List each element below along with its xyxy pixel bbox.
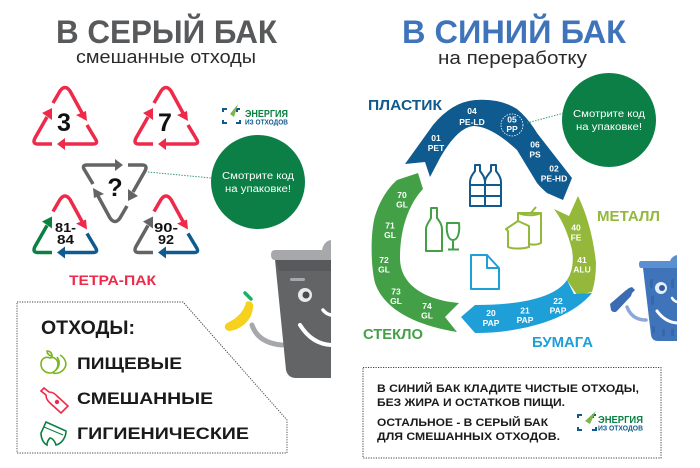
recycling triangle: unknown code: ? <box>107 174 123 202</box>
code labels: paper <box>483 296 567 328</box>
label: metal: МЕТАЛЛ <box>597 209 660 225</box>
code labels: metal: 41 <box>577 255 587 265</box>
connector: right dotted line <box>527 113 564 123</box>
label: paper: БУМАГА <box>532 335 594 351</box>
text block: clean waste: В СИНИЙ БАК КЛАДИТЕ ЧИСТЫЕ ОТХОДЫ, <box>377 382 639 395</box>
arrow: paper <box>461 280 592 333</box>
callout: right green circle: на упаковке! <box>576 122 642 133</box>
smile <box>300 325 331 345</box>
code labels: plastic: PS <box>529 150 541 160</box>
arm <box>252 325 282 345</box>
code labels: glass: GL <box>396 200 408 210</box>
code labels: plastic: 05 <box>507 114 517 124</box>
icon: paper sheet <box>471 255 499 289</box>
list item: hygiene <box>41 422 249 445</box>
code labels: glass: 73 <box>391 286 401 296</box>
recycling triangle: tetra pak 90-92: 90- <box>154 220 178 235</box>
code labels: plastic: 02 <box>549 164 559 174</box>
code labels: plastic: PET <box>428 143 445 153</box>
logo: energy from waste, bottom <box>578 411 643 432</box>
illustration: blue bin character with bottle <box>610 255 677 341</box>
title: blue bin heading: В СИНИЙ БАК <box>402 14 626 50</box>
label: plastic: ПЛАСТИК <box>368 98 442 114</box>
text block: the rest <box>377 416 560 443</box>
panel: blue bin instructions <box>363 368 661 458</box>
logo: energy from waste, top: ИЗ ОТХОДОВ <box>245 120 288 126</box>
bin vents <box>650 279 674 336</box>
recycling triangle: tetra pak 81-84: 84 <box>57 232 75 247</box>
logo: energy from waste, bottom: ИЗ ОТХОДОВ <box>598 426 643 432</box>
code labels: plastic: 06 <box>530 140 540 150</box>
logo: energy from waste, bottom: ЭНЕРГИЯ <box>598 415 643 426</box>
arm <box>627 307 646 320</box>
illustration: grey bin character with banana <box>225 240 331 378</box>
title: grey bin heading: смешанные отходы <box>76 47 256 67</box>
recycling triangle: tetra pak 90-92: 92 <box>158 232 174 247</box>
callout: left green circle: на упаковке! <box>225 184 291 195</box>
code labels: paper: PAP <box>550 306 567 316</box>
bin body <box>643 268 677 341</box>
code labels: paper: 22 <box>553 296 563 306</box>
code labels: glass: 70 <box>397 190 407 200</box>
code labels: metal <box>571 222 591 274</box>
list item: mixed <box>41 388 213 413</box>
code labels: paper: 20 <box>486 308 496 318</box>
text block: clean waste: БЕЗ ЖИРА И ОСТАТКОВ ПИЩИ. <box>377 397 565 409</box>
code labels: plastic: 01 <box>431 133 441 143</box>
recycling triangle: code 7 <box>135 88 198 150</box>
code labels: glass <box>378 190 433 320</box>
icon: plastic bottles <box>470 165 501 206</box>
code labels: plastic: 04 <box>467 106 477 116</box>
text block: the rest: ОСТАЛЬНОЕ - В СЕРЫЙ БАК <box>377 416 548 429</box>
title: blue bin heading: на переработку <box>438 48 587 68</box>
panel: waste list <box>17 302 287 453</box>
title: grey bin heading: В СЕРЫЙ БАК <box>56 14 277 50</box>
arrow: glass <box>372 173 459 332</box>
code labels: paper: 21 <box>520 306 530 316</box>
recycling triangle: tetra pak 81-84 <box>34 196 97 258</box>
code labels: metal: ALU <box>573 264 591 274</box>
code labels: plastic: PE-LD <box>459 117 485 127</box>
callout: right green circle <box>562 73 656 167</box>
recycling triangle: code 3: 3 <box>57 109 71 137</box>
recycling triangle: unknown code <box>83 159 146 222</box>
bottle <box>610 287 635 312</box>
icon: glass bottle and wine glass <box>426 208 459 251</box>
code labels: plastic: PE-HD <box>541 174 567 184</box>
connector: left dotted line <box>148 172 211 178</box>
arrow: plastic <box>405 100 572 200</box>
smile <box>657 311 677 323</box>
list item: food: ПИЩЕВЫЕ <box>77 354 182 373</box>
heading: waste: ОТХОДЫ: <box>41 318 135 339</box>
label: glass: СТЕКЛО <box>363 327 423 343</box>
logo: energy from waste, top: ЭНЕРГИЯ <box>245 109 288 120</box>
code labels: metal: 40 <box>571 222 581 232</box>
code labels: glass: GL <box>384 230 396 240</box>
recycling triangle: tetra pak 90-92 <box>135 196 198 258</box>
code labels: glass: 72 <box>379 255 389 265</box>
icon: cans <box>506 207 541 248</box>
text block: the rest: ДЛЯ СМЕШАННЫХ ОТХОДОВ. <box>377 431 560 443</box>
bin body <box>275 260 331 378</box>
text block: clean waste <box>377 382 639 409</box>
recycling triangle: tetra pak 81-84: 81- <box>55 220 76 235</box>
eye <box>298 288 312 302</box>
code labels: glass: 74 <box>422 301 432 311</box>
callout: right green circle: Смотрите код <box>573 109 645 120</box>
label: tetra pak: ТЕТРА-ПАК <box>69 272 156 288</box>
recycling cycle <box>372 100 596 333</box>
title: grey bin heading <box>56 14 277 67</box>
code labels: plastic <box>428 106 567 184</box>
eye <box>655 282 667 294</box>
list item: food <box>41 351 182 373</box>
banana <box>225 293 253 331</box>
callout: left green circle: Смотрите код <box>222 171 294 182</box>
arrow: metal <box>554 196 596 295</box>
list item: hygiene: ГИГИЕНИЧЕСКИЕ <box>77 424 249 443</box>
code labels: paper: PAP <box>517 315 534 325</box>
code labels: plastic: PP <box>506 124 518 134</box>
callout: left green circle <box>211 135 305 229</box>
code labels: glass: 71 <box>385 220 395 230</box>
title: blue bin heading <box>402 14 626 68</box>
code labels: glass: GL <box>390 296 402 306</box>
code labels: glass: GL <box>421 310 433 320</box>
list item: mixed: СМЕШАННЫЕ <box>77 389 213 408</box>
logo: energy from waste, top <box>223 104 288 126</box>
code labels: metal: FE <box>571 232 582 242</box>
recycling triangle: code 3 <box>34 88 97 150</box>
code labels: glass: GL <box>378 264 390 274</box>
recycling triangle: code 7: 7 <box>158 109 172 137</box>
code labels: paper: PAP <box>483 318 500 328</box>
